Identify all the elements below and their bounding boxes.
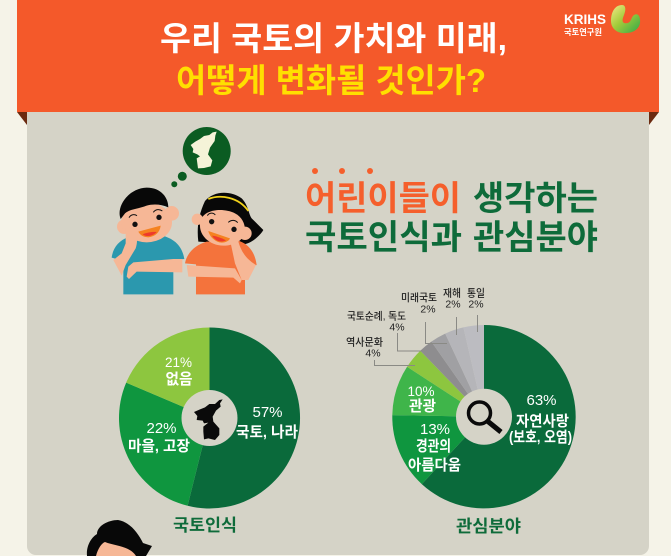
slice: 2% 미래국토	[431, 334, 484, 417]
labels: inside slices: 관광	[409, 398, 436, 415]
labels: outside slices: 국토순례, 독도	[347, 310, 406, 322]
labels: 없음	[166, 371, 193, 388]
labels: outside slices: 재해	[443, 286, 461, 300]
girl	[185, 193, 263, 294]
labels: outside slices: 2%	[468, 298, 484, 310]
icon: black Korea map	[194, 399, 223, 440]
heading: 국토인식과	[305, 219, 462, 257]
logo: KRIHS: KRIHS	[564, 12, 606, 27]
labels: 마을, 고장	[128, 438, 190, 455]
icon: thought bubble with map	[171, 127, 231, 187]
heading: 관심분야	[473, 219, 598, 257]
heading	[305, 168, 598, 257]
labels: inside slices: 아름다움	[408, 457, 461, 474]
chart title: 관심분야	[456, 517, 521, 536]
labels: 57%	[252, 404, 283, 421]
slice: 10% 관광	[392, 367, 484, 417]
slice: 13% 경관의 아름다움	[392, 415, 484, 484]
leader lines	[374, 315, 478, 366]
slice: 2% 재해	[445, 327, 484, 417]
labels: 국토, 나라	[236, 424, 298, 441]
title	[160, 20, 507, 99]
title: 우리 국토의 가치와 미래,	[160, 20, 507, 57]
labels: outside slices: 미래국토	[401, 292, 437, 304]
labels: inside slices	[407, 384, 572, 474]
labels: inside slices: 10%	[407, 384, 435, 399]
boy	[112, 188, 184, 294]
labels: outside slices: 4%	[389, 322, 405, 334]
icon: magnifier	[468, 402, 501, 432]
heading: 어린이들이	[305, 180, 461, 218]
labels: outside slices: 2%	[420, 304, 436, 316]
panel: main background	[27, 100, 649, 555]
title: 어떻게 변화될 것인가?	[176, 62, 486, 99]
labels: inside slices: 경관의	[416, 438, 451, 455]
slice: 4% 역사문화	[407, 351, 484, 417]
labels: outside slices: 역사문화	[346, 336, 383, 348]
chart title: 국토인식	[173, 516, 237, 535]
labels: inside slices: 자연사랑	[516, 413, 569, 430]
labels: outside slices: 4%	[365, 348, 381, 360]
slice: 22% 마을, 고장	[119, 383, 210, 506]
donut chart: 관심분야	[346, 286, 576, 536]
heading: 생각하는	[473, 180, 598, 218]
labels	[128, 355, 298, 455]
labels: outside slices: 통일	[467, 286, 485, 300]
labels: inside slices: 63%	[526, 392, 557, 409]
labels: outside slices: 2%	[445, 298, 461, 310]
logo: KRIHS: 국토연구원	[564, 27, 602, 37]
slice: 2% 통일	[463, 325, 484, 417]
slice: 21% 없음	[126, 328, 210, 418]
labels: inside slices: 13%	[420, 421, 450, 438]
donut chart: 국토인식	[119, 328, 300, 535]
labels: 22%	[146, 420, 177, 437]
slice: 63% 자연사랑	[422, 325, 576, 508]
labels: 21%	[165, 355, 192, 370]
labels: inside slices: (보호, 오염)	[509, 429, 572, 446]
labels: outside slices	[346, 286, 485, 360]
slice: 4% 국토순례 독도	[420, 342, 484, 417]
slice: 57% 국토, 나라	[188, 328, 300, 509]
illustration: cropped man's head at bottom	[87, 520, 152, 556]
header banner	[17, 0, 659, 125]
logo: KRIHS	[564, 5, 640, 37]
